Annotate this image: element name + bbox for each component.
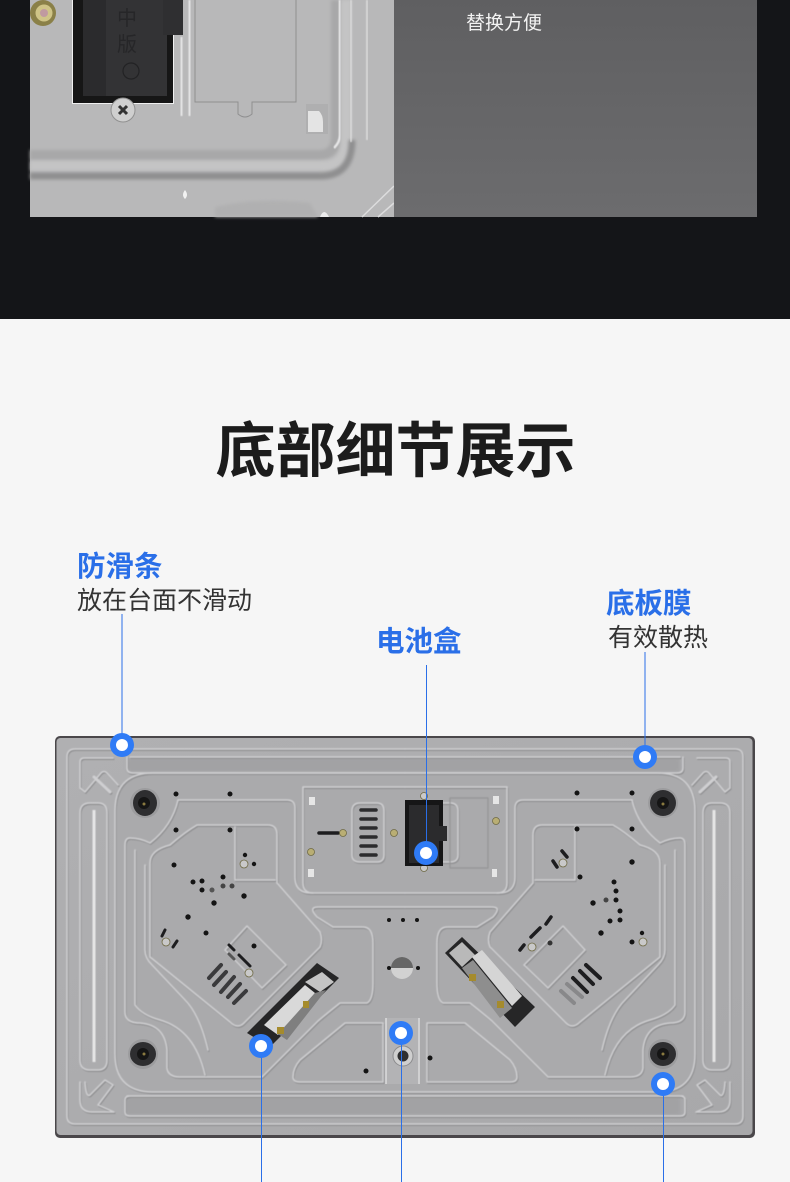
label description: 有效散热 [608, 624, 708, 652]
leader line [644, 652, 646, 757]
title: 底部细节展示 [216, 418, 576, 485]
center round opening [391, 957, 413, 979]
panel: description panel [394, 0, 757, 217]
callout: anti-slip strip [77, 551, 252, 757]
callout marker: igniter [249, 1034, 273, 1182]
dark top section background [0, 0, 790, 319]
panel: underside photo of the stove [55, 736, 755, 1138]
square clips [308, 796, 499, 877]
marker [110, 733, 134, 757]
plate [55, 736, 755, 1138]
battery box [405, 800, 447, 866]
callout: battery box [376, 626, 462, 865]
battery box: 中 [117, 7, 137, 30]
marker [414, 841, 438, 865]
gas inlet [386, 1018, 419, 1084]
label description: 放在台面不滑动 [77, 587, 252, 615]
nut [30, 0, 56, 26]
callout marker: rubber foot [651, 1072, 675, 1182]
battery box [72, 0, 183, 104]
ventilation and mounting holes [172, 790, 644, 1074]
rubber feet [128, 788, 678, 1069]
label heading: 电池盒 [376, 626, 462, 658]
outlined plate panel [195, 0, 296, 117]
callout: base plate film [606, 588, 708, 769]
label heading: 防滑条 [77, 551, 163, 583]
battery box: 版 [117, 33, 137, 56]
slots [162, 810, 600, 1003]
leader line [121, 614, 123, 745]
embossed bands [30, 0, 394, 217]
label heading: 底板膜 [606, 588, 692, 620]
metal clip [306, 104, 328, 134]
screws [162, 792, 647, 1075]
leader line [426, 665, 428, 853]
panel: cropped photo of battery compartment [30, 0, 394, 217]
white ribs [181, 0, 190, 116]
left igniter slot [247, 963, 339, 1047]
callout marker: gas inlet [389, 1021, 413, 1182]
marker [633, 745, 657, 769]
embossed contours [67, 749, 744, 1125]
right igniter slot [445, 937, 535, 1027]
screw [111, 98, 135, 122]
caption: 替换方便 [466, 12, 542, 34]
